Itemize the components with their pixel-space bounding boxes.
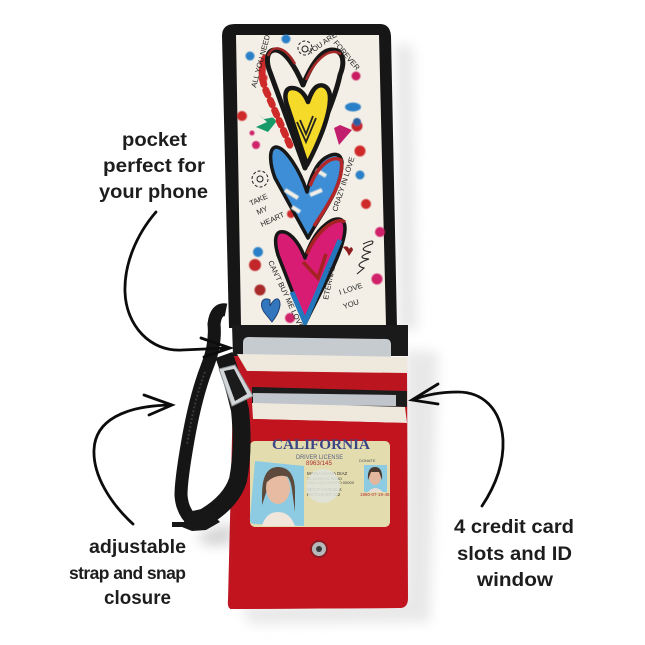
ID license text: SEX:F HAIR:BLK [307,487,342,492]
dark red heart doodle [343,246,353,256]
label: window [476,570,553,591]
label: your phone [99,182,208,203]
label: 4 credit card [454,517,574,538]
arrow [125,212,230,357]
flap cream lining [236,35,386,325]
colored dots [237,34,385,323]
label: perfect for [103,156,206,177]
handwritten phrases [248,30,364,330]
phone pocket flap [222,24,397,330]
ID license text: DONATE [359,458,376,463]
ID license text: 22 MISSION ROAD [307,476,342,481]
flap black leather border [222,24,397,328]
heart 3 blue [271,147,342,238]
handwritten phrases: CAN'T BUY ME LOVE [266,259,306,330]
small photo [364,465,387,492]
strap highlight [187,370,238,445]
label [99,130,208,203]
snap closure [310,540,328,558]
ID license text: SAN LUIS OBISPO 00000 [307,480,355,485]
cream slot 1 [237,354,407,373]
handwritten phrases: MY [255,204,269,217]
label: pocket [122,130,188,151]
strap knot [172,508,220,531]
handwritten phrases: ETERNAL [321,265,337,300]
callout: pocket perfect for your phone [99,130,230,357]
handwritten phrases: HEART [259,210,286,229]
label [69,537,186,609]
ID holder face [262,467,295,526]
pink heart doodle [334,125,352,145]
black slot edge [252,387,407,407]
handwritten phrases: FOREVER [331,39,362,73]
ID license text: 8963/145 [306,461,333,467]
credit card 1 [243,337,391,357]
credit card 2 [253,393,396,406]
wallet body [228,325,408,609]
ID photo background [250,461,304,526]
handwritten phrases: TAKE [248,192,269,208]
ID license text: HGT:5-8 WT:102 [307,492,341,497]
label: slots and ID [457,544,572,565]
cream slot 2 [252,403,407,423]
red slot [247,371,407,392]
label: adjustable [89,537,186,558]
ID window [250,437,390,527]
callout: 4 credit card slots and ID window [412,384,574,591]
hologram seal [306,469,340,503]
ID license text [296,455,390,497]
ID license text: 1980-07-19-45 [360,492,390,497]
label: strap and snap [69,563,186,583]
handwritten phrases: CRAZY IN LOVE [330,156,357,213]
heart 2 yellow [285,85,330,165]
red dotted line [262,58,292,150]
strap [172,310,253,531]
ID license text: DRIVER LICENSE [296,455,343,461]
green heart doodle [256,114,276,132]
drop shadow [196,44,438,624]
handwritten phrases: YOU ARE [306,30,338,57]
upper black pocket [232,325,408,356]
buckle [219,365,253,406]
handwritten phrases: YOU [342,297,360,311]
arrow [412,384,503,506]
handwritten phrases: ALL YOU NEED [249,33,272,89]
label [454,517,574,591]
callout: adjustable strap and snap closure [69,395,186,609]
ID license text: MARIA DIANA DIAZ [307,471,348,476]
flower doodles [252,41,373,274]
red front panel [230,419,407,609]
red back panel [228,356,408,609]
heart 4 pink [276,219,345,324]
label: closure [104,588,171,609]
arrow [94,395,172,524]
blue small heart [262,299,280,322]
handwritten phrases: I LOVE [338,281,364,297]
ID title: CALIFORNIA [272,437,370,453]
strap loop [181,310,226,522]
heart 1 [267,50,343,168]
